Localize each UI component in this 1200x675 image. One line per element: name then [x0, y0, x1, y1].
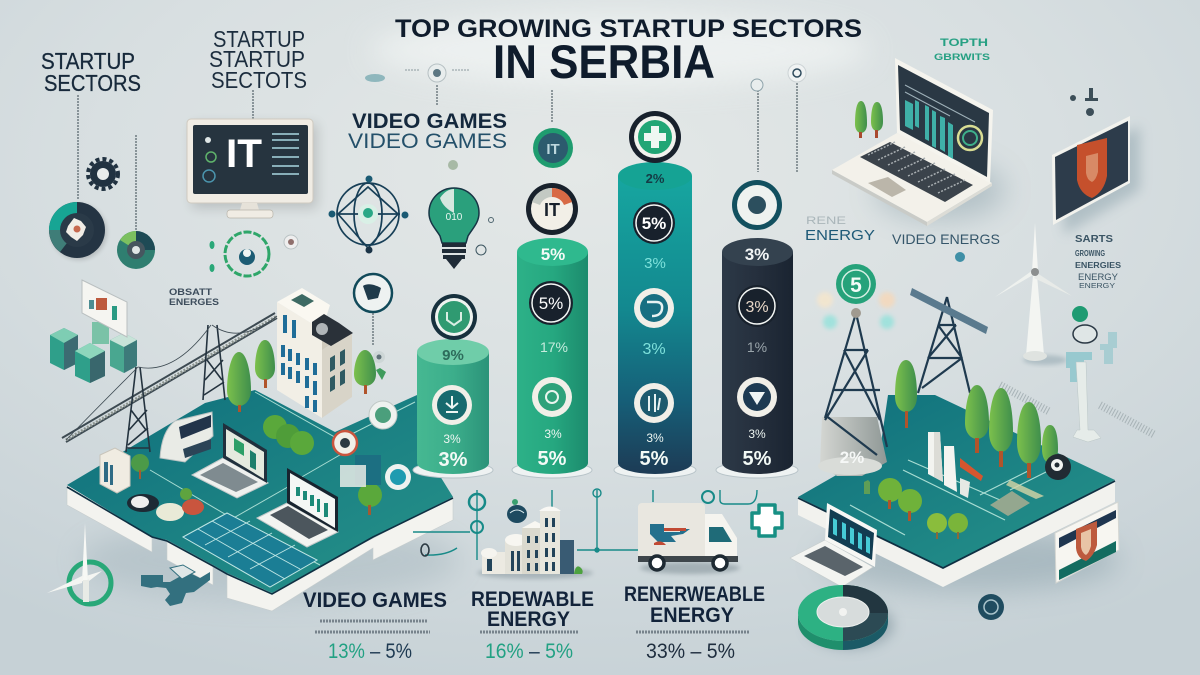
heading: startup sectors middle — [209, 26, 307, 93]
monitor IT: IT — [226, 132, 262, 176]
title — [370, 14, 870, 88]
bar: teal tallest: 3% — [644, 255, 666, 272]
bar: teal tallest — [614, 111, 696, 478]
small building — [100, 448, 149, 493]
wind turbine — [995, 223, 1072, 365]
small text: obsatt energes: ENERGES — [169, 297, 219, 307]
icon: light bulb: 010 — [446, 212, 463, 223]
monitor IT — [187, 119, 317, 218]
bar: green short — [413, 294, 493, 478]
bar: teal tallest: 3% — [642, 341, 666, 358]
donut chart — [798, 585, 894, 650]
platform side walls — [798, 480, 1115, 587]
building — [277, 288, 353, 418]
laptop two — [257, 468, 338, 547]
tower glow — [817, 292, 895, 329]
bottom label: renewable energy: RENERWEABLE — [624, 583, 765, 606]
camera icon — [1045, 454, 1071, 480]
trees on platform — [227, 340, 382, 515]
icon: small top badges — [365, 64, 806, 170]
small text: top growth: GBRWITS — [934, 52, 990, 63]
icon: puzzle piece — [141, 565, 210, 606]
label: energy — [805, 215, 875, 244]
icon: serbian flag card — [1055, 502, 1119, 583]
base cylinder — [818, 417, 887, 476]
bar: navy: 3% — [745, 245, 769, 264]
platform top — [67, 390, 453, 593]
bottom label: renewable energy: 33% – 5% — [646, 640, 735, 663]
trees — [864, 360, 1058, 539]
label: energy: RENE — [806, 215, 846, 227]
heading: video games: VIDEO GAMES — [348, 130, 507, 153]
heading: video games — [348, 110, 507, 153]
label: video energs — [892, 231, 1000, 262]
icon: coin — [978, 594, 1004, 620]
bar: green short: 3% — [443, 432, 461, 446]
laptop: big right — [832, 58, 1005, 226]
bar: green tall — [512, 183, 592, 478]
city building cluster — [477, 506, 593, 579]
panel: right isometric platform — [798, 288, 1120, 592]
icon: small donut — [117, 231, 155, 269]
label: video energs: VIDEO ENERGS — [892, 231, 1000, 247]
buttons — [127, 488, 204, 521]
bar: teal tallest: 2% — [646, 171, 665, 186]
panel: left isometric platform — [67, 288, 460, 611]
title: IN SERBIA — [493, 35, 715, 88]
bottom label: renewable energy: ENERGY — [650, 604, 734, 627]
bar: green tall: 3% — [544, 427, 562, 441]
bottom label: video games: VIDEO GAMES — [303, 589, 447, 612]
heading: startup sectors left — [41, 48, 141, 96]
bar: green tall: IT — [544, 200, 560, 220]
heading: startup sectors middle: STARTUP — [213, 26, 305, 52]
icon: green ring — [210, 232, 298, 276]
heading: video games: VIDEO GAMES — [352, 110, 507, 133]
bottom label: video games: 13% – 5% — [328, 640, 412, 663]
laptop: small right — [790, 503, 877, 587]
heading: startup sectors middle: SECTOTS — [211, 67, 307, 93]
bar: navy: 5% — [743, 448, 772, 470]
truck — [638, 503, 740, 574]
icon: light bulb — [429, 188, 494, 269]
chart: cylinder bars — [413, 111, 798, 478]
small text: top growth: TOPTH — [940, 37, 988, 49]
heading: startup sectors middle: STARTUP — [209, 46, 305, 72]
icon: trees near laptop — [855, 101, 883, 138]
bar: teal tallest: 5% — [640, 448, 669, 470]
bottom label: redewable energy: REDEWABLE — [471, 588, 594, 611]
small text: obsatt energes — [169, 287, 219, 307]
bar: green short: 3% — [439, 449, 468, 471]
bar: teal tallest: 3% — [646, 431, 664, 445]
small text: starts energy: GROWING — [1075, 249, 1105, 258]
solar grid — [183, 513, 317, 587]
bar: green short: 9% — [442, 347, 464, 364]
icon: green coin J5 — [836, 264, 876, 304]
crane bridge — [62, 313, 277, 452]
laptop one — [192, 423, 268, 498]
icon: plus sign — [752, 505, 782, 536]
bar: navy: 3% — [748, 427, 766, 441]
small text: obsatt energes: OBSATT — [169, 287, 213, 297]
icon: left donut — [49, 202, 107, 260]
icon: green boxes and billboard — [50, 280, 137, 383]
bottom label: redewable energy — [471, 588, 594, 663]
flag tablet — [1052, 116, 1140, 235]
bar: navy: 1% — [747, 339, 767, 355]
small text: starts energy: ENERGY — [1079, 283, 1115, 290]
small text: top growth — [934, 37, 990, 63]
icon: green coin J5: 5 — [850, 274, 862, 297]
bar: green tall: 5% — [541, 245, 565, 264]
platform top — [798, 395, 1115, 568]
icon: turbine ring — [47, 523, 111, 604]
small text: starts energy — [1075, 234, 1122, 290]
connector lines lower — [413, 489, 757, 560]
small text: starts energy: ENERGIES — [1075, 261, 1122, 270]
bottom label: renewable energy — [624, 583, 765, 663]
bar: green tall: 5% — [538, 448, 567, 470]
bottom label: redewable energy: ENERGY — [487, 608, 570, 631]
heading: startup sectors left: STARTUP — [41, 48, 135, 74]
energy towers — [825, 297, 970, 455]
small text: starts energy: ENERGY — [1078, 272, 1118, 282]
icon: small top badges: IT — [546, 141, 560, 158]
platform badges — [333, 401, 411, 490]
bottom label: video games — [303, 589, 447, 663]
bar: teal tallest: 5% — [642, 214, 666, 233]
connector lines upper — [78, 70, 797, 345]
title: TOP GROWING STARTUP SECTORS — [395, 15, 862, 43]
icon: small marks near tablet — [1070, 88, 1098, 116]
icon: mechanical parts — [1000, 306, 1155, 442]
arch sign — [160, 412, 213, 462]
platform side walls — [67, 485, 453, 611]
factory columns — [928, 432, 983, 498]
bar: green tall: 5% — [539, 294, 563, 313]
bar: navy — [716, 180, 798, 478]
heading: startup sectors left: SECTORS — [44, 70, 141, 96]
icon: upper ring marker — [354, 274, 392, 380]
icon: globe network — [328, 176, 408, 254]
bottom label: redewable energy: 16% – 5% — [485, 640, 573, 663]
bar: navy: 3% — [745, 299, 769, 316]
crossbar — [910, 288, 988, 334]
label: energy: ENERGY — [805, 227, 875, 244]
bar: green tall: 17% — [540, 339, 568, 355]
icon: gear — [88, 159, 118, 189]
base cylinder: 2% — [840, 448, 864, 467]
icon: small token — [507, 499, 527, 523]
small text: starts energy: SARTS — [1075, 234, 1113, 245]
